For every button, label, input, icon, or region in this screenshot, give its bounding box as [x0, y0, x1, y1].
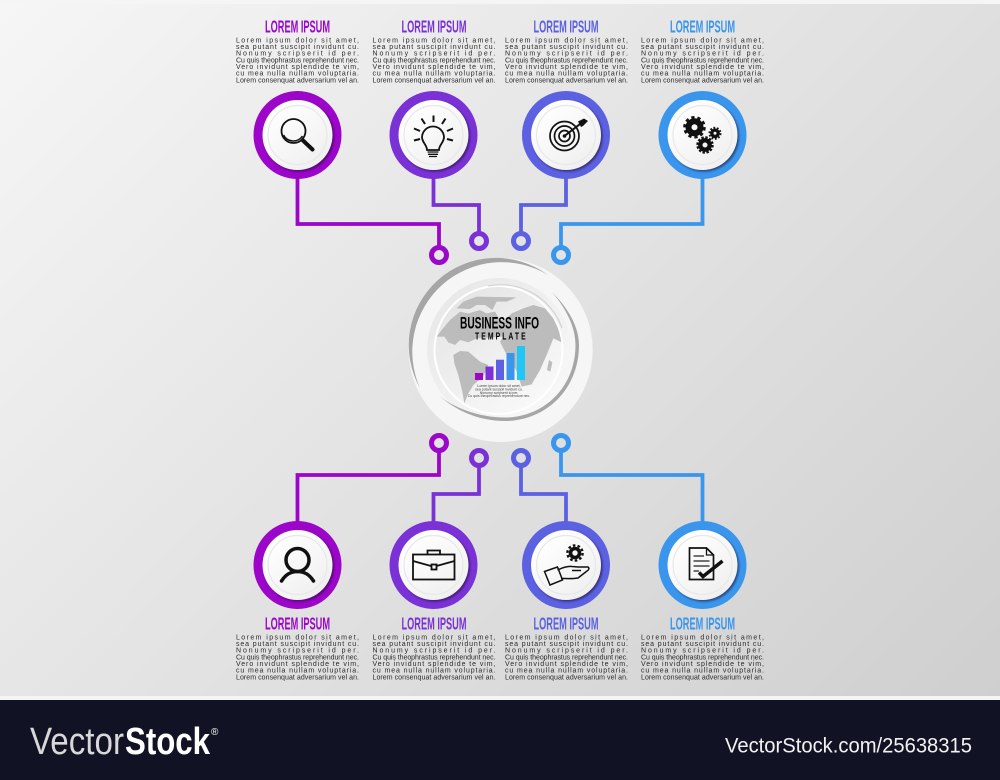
body text: Nonumy scripserit id per. [505, 648, 628, 655]
icon: three gears [685, 118, 721, 152]
body text: Lorem ipsum dolor sit amet, [641, 38, 764, 44]
body text: cu mea nulla nullam voluptaria. [236, 668, 359, 675]
body text: sea putant suscipit invidunt cu. [236, 44, 359, 51]
title: BUSINESS INFO [460, 313, 539, 332]
body text: Lorem consenquat adversarium vel an. [641, 77, 764, 84]
top light band [0, 0, 1000, 4]
body text: Cu quis theophrastus reprehendunt nec. [505, 57, 628, 64]
body text: Cu quis theophrastus reprehendunt nec. [236, 654, 359, 661]
body text: Vero invidunt splendide te vim, [372, 64, 496, 71]
panel: top step 3 text [505, 16, 628, 84]
heading: LOREM IPSUM [265, 16, 330, 36]
connector: top column 1 [298, 178, 439, 247]
body text: Cu quis theophrastus reprehendunt nec. [505, 654, 628, 661]
body text: Lorem consenquat adversarium vel an. [641, 674, 764, 681]
body text: Nonumy scripserit id per. [236, 648, 359, 655]
body text [505, 38, 628, 84]
body text: Nonumy scripserit id per. [236, 51, 359, 58]
body text: Vero invidunt splendide te vim, [372, 661, 496, 668]
body text: cu mea nulla nullam voluptaria. [372, 668, 496, 675]
badge: document [658, 521, 746, 609]
body text: sea putant suscipit invidunt cu. [372, 44, 496, 51]
icon: magnifier [282, 119, 312, 150]
body text: cu mea nulla nullam voluptaria. [505, 668, 628, 675]
footer logo: Vector [30, 721, 124, 763]
body text: Lorem ipsum dolor sit amet, [236, 634, 359, 642]
body text: Cu quis theophrastus reprehendunt nec. [236, 57, 359, 64]
body text: Vero invidunt splendide te vim, [236, 661, 359, 668]
icon: light bulb [414, 116, 453, 156]
body text: cu mea nulla nullam voluptaria. [372, 71, 496, 78]
grey crescent upper left [409, 258, 548, 388]
panel: top step 1 text [236, 16, 359, 84]
body text: cu mea nulla nullam voluptaria. [641, 668, 764, 675]
central hub [409, 258, 593, 442]
icon: target and arrow [550, 118, 588, 150]
small caption [468, 384, 530, 398]
heading: LOREM IPSUM [534, 614, 598, 634]
body text: sea putant suscipit invidunt cu. [505, 44, 628, 51]
body text: sea putant suscipit invidunt cu. [236, 641, 359, 648]
body text: Lorem consenquat adversarium vel an. [372, 674, 496, 681]
body text: sea putant suscipit invidunt cu. [372, 641, 496, 648]
body text: sea putant suscipit invidunt cu. [641, 641, 764, 648]
inner disc [427, 278, 571, 422]
body text: Lorem consenquat adversarium vel an. [236, 674, 359, 681]
body text: Vero invidunt splendide te vim, [641, 64, 764, 71]
body text: Lorem ipsum dolor sit amet, [505, 38, 628, 44]
badge: person [254, 521, 342, 609]
panel: top step 2 text [372, 16, 496, 84]
connector: bottom column 2 [434, 466, 479, 522]
panel: bottom step 2 text [372, 614, 496, 681]
body text: Lorem consenquat adversarium vel an. [236, 77, 359, 84]
grey crescent lower right [438, 292, 579, 421]
body text: Cu quis theophrastus reprehendunt nec. [372, 57, 496, 64]
body text: cu mea nulla nullam voluptaria. [641, 71, 764, 78]
body text [236, 38, 359, 84]
heading: LOREM IPSUM [534, 16, 598, 36]
outer disc [409, 258, 593, 442]
footer logo: Stock [125, 721, 211, 763]
body text: Cu quis theophrastus reprehendunt nec. [372, 654, 496, 661]
body text: Lorem consenquat adversarium vel an. [372, 77, 496, 84]
panel: bottom step 3 text [505, 614, 628, 681]
badge: briefcase [390, 521, 478, 609]
badge: idea [390, 91, 478, 179]
body text: Lorem ipsum dolor sit amet, [372, 38, 496, 44]
badge: hand and gear [522, 521, 610, 609]
body text: cu mea nulla nullam voluptaria. [505, 71, 628, 78]
panel: bottom step 1 text [236, 614, 359, 681]
body text: Nonumy scripserit id per. [372, 648, 496, 655]
body text: sea putant suscipit invidunt cu. [641, 44, 764, 51]
body text: Cu quis theophrastus reprehendunt nec. [641, 57, 764, 64]
heading: LOREM IPSUM [670, 614, 735, 634]
footer url: VectorStock.com/25638315 [725, 734, 972, 758]
icon: person [282, 548, 314, 581]
footer logo: ® [211, 727, 219, 738]
body text: Lorem ipsum dolor sit amet, [372, 634, 496, 642]
body text [641, 634, 764, 681]
footer logo [30, 721, 219, 763]
body text [236, 634, 359, 681]
subtitle: TEMPLATE [475, 330, 526, 342]
body text: Lorem consenquat adversarium vel an. [505, 77, 628, 84]
icon: hand holding gear [544, 545, 589, 585]
small caption: sea putant suscipit invidunt cu. [475, 388, 523, 392]
small caption: Nonumy scripserit id per. [480, 391, 518, 395]
connector: top column 2 [434, 178, 479, 233]
body text: Vero invidunt splendide te vim, [505, 64, 628, 71]
body text: Cu quis theophrastus reprehendunt nec. [641, 654, 764, 661]
heading: LOREM IPSUM [670, 16, 735, 36]
body text: Lorem ipsum dolor sit amet, [505, 634, 628, 642]
heading: LOREM IPSUM [402, 614, 466, 634]
icon: briefcase [413, 550, 454, 580]
badge: target [522, 91, 610, 179]
badge: gears [658, 91, 746, 179]
body text: Nonumy scripserit id per. [505, 51, 628, 58]
body text: Lorem ipsum dolor sit amet, [641, 634, 764, 642]
body text: Vero invidunt splendide te vim, [641, 661, 764, 668]
body text: Nonumy scripserit id per. [641, 648, 764, 655]
body text: Vero invidunt splendide te vim, [236, 64, 359, 71]
body text: Nonumy scripserit id per. [372, 51, 496, 58]
bar chart [475, 346, 525, 380]
node dots [432, 234, 568, 466]
footer bar [0, 700, 1000, 780]
heading: LOREM IPSUM [402, 16, 466, 36]
body text: Lorem consenquat adversarium vel an. [505, 674, 628, 681]
body text [505, 634, 628, 681]
heading: LOREM IPSUM [265, 614, 330, 634]
small caption: Cu quis theophrastus reprehendunt nec. [468, 394, 530, 398]
panel: bottom step 4 text [641, 614, 764, 681]
body text [372, 634, 496, 681]
body text: Lorem ipsum dolor sit amet, [236, 38, 359, 44]
globe disc [434, 285, 564, 415]
panel: top step 4 text [641, 16, 764, 84]
small caption: Lorem ipsum dolor sit amet, [477, 384, 521, 388]
bottom light band [0, 696, 1000, 700]
connector: bottom column 4 [561, 451, 702, 522]
body text: cu mea nulla nullam voluptaria. [236, 71, 359, 78]
globe map [437, 297, 562, 403]
badge: search [254, 91, 342, 179]
body text: Nonumy scripserit id per. [641, 51, 764, 58]
connector: bottom column 3 [521, 466, 566, 522]
connector: bottom column 1 [298, 451, 439, 522]
body text [641, 38, 764, 84]
body text: Vero invidunt splendide te vim, [505, 661, 628, 668]
connector: top column 3 [521, 178, 566, 233]
icon: document with check [690, 548, 722, 580]
body text: sea putant suscipit invidunt cu. [505, 641, 628, 648]
connector: top column 4 [561, 178, 702, 247]
body text [372, 38, 496, 84]
